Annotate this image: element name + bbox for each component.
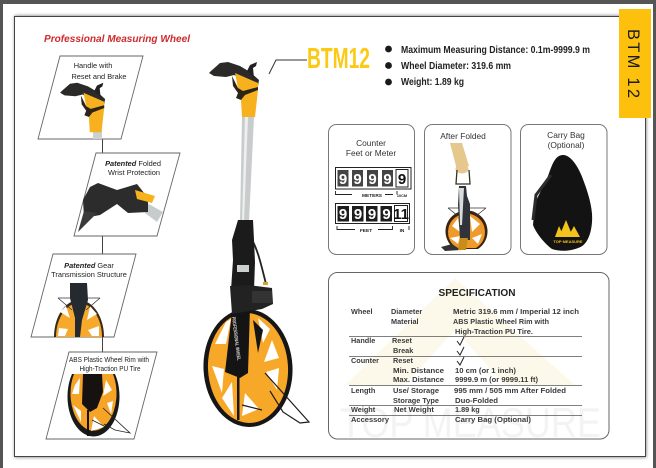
icon: wheel rim photo xyxy=(68,374,130,436)
connector between feature panels xyxy=(102,139,104,352)
panel: wheel rim xyxy=(46,352,157,439)
spec table: Metric 319.6 mm / Imperial 12 inch xyxy=(453,307,579,316)
panel: carry bag xyxy=(520,124,607,254)
spec table: Max. Distance xyxy=(393,375,444,384)
tab: model label: BTM 12 xyxy=(624,29,642,98)
spec table: Reset xyxy=(392,336,412,345)
spec table: Accessory xyxy=(351,415,390,424)
key specs list: Weight: 1.89 kg xyxy=(401,77,464,88)
meter display: 9 xyxy=(398,171,406,188)
feet display: 9 xyxy=(382,206,391,223)
pole xyxy=(240,117,254,222)
meter display: 9 xyxy=(383,171,392,188)
spec table: Handle xyxy=(351,336,375,345)
key specs list: Wheel Diameter: 319.6 mm xyxy=(401,61,511,72)
spec table: Material xyxy=(391,317,419,326)
feet display xyxy=(336,204,410,234)
tab: model label xyxy=(619,9,651,118)
heading: specification: SPECIFICATION xyxy=(438,287,516,299)
text: handle caption: Reset and Brake xyxy=(71,72,127,81)
spec table: 1.89 kg xyxy=(455,405,480,414)
meter display: 9 xyxy=(353,171,362,188)
watermark: top measure logo xyxy=(340,278,601,446)
text: gear caption: Transmission Structure xyxy=(51,270,127,279)
stand wires xyxy=(242,373,309,423)
text: handle caption: Handle with xyxy=(74,61,112,70)
spec table xyxy=(349,307,582,424)
spec table: 9999.9 m (or 9999.11 ft) xyxy=(455,375,539,384)
text: counter heading: Counter xyxy=(356,138,386,148)
heading: model: BTM12 xyxy=(307,43,370,75)
counter housing xyxy=(230,285,273,314)
feet display: 9 xyxy=(339,206,347,223)
spec table: Min. Distance xyxy=(393,366,444,375)
leader line xyxy=(269,60,307,74)
fork xyxy=(253,320,263,353)
icon: folded joint photo xyxy=(78,183,163,232)
text: wrist protection caption: Patented Folded xyxy=(105,159,161,168)
key specs list: Maximum Measuring Distance: 0.1m-9999.9 m xyxy=(401,45,590,56)
key specs list xyxy=(385,45,590,88)
spec table: Use/ Storage xyxy=(393,386,439,395)
feet display: 11 xyxy=(393,206,409,223)
meter display: 9 xyxy=(368,171,377,188)
spec table: High-Traction PU Tire. xyxy=(455,327,533,336)
title: Professional Measuring Wheel xyxy=(44,34,190,45)
text: carry bag heading: (Optional) xyxy=(548,140,585,150)
spec table: 995 mm / 505 mm After Folded xyxy=(454,386,566,395)
feet display: FEET xyxy=(360,228,372,234)
meter display: 10CM xyxy=(397,194,407,198)
panel: handle xyxy=(38,56,143,139)
handle xyxy=(209,62,259,117)
text: after folded heading: After Folded xyxy=(440,131,486,141)
spec table: Carry Bag (Optional) xyxy=(455,415,532,424)
meter display xyxy=(336,168,411,199)
spec table: Break xyxy=(393,346,414,355)
meter display: 9 xyxy=(339,171,347,188)
spec table: Counter xyxy=(351,356,379,365)
product photo: main measuring wheel xyxy=(200,62,309,429)
icon: handle photo xyxy=(60,83,105,139)
text: wheel rim caption: ABS Plastic Wheel Rim with xyxy=(69,355,149,364)
spec table: ABS Plastic Wheel Rim with xyxy=(453,317,549,326)
watermark: top measure logo: TOP MEASURE xyxy=(340,399,601,446)
bag logo: TOP MEASURE xyxy=(553,239,583,244)
icon: gear photo xyxy=(54,283,104,337)
feet display: IN xyxy=(400,228,405,234)
text: counter heading: Feet or Meter xyxy=(346,148,396,158)
spec table: Weight xyxy=(351,405,376,414)
panel: gear transmission xyxy=(31,254,136,337)
spec table: Net Weight xyxy=(394,405,435,414)
text: gear caption: Patented Gear xyxy=(64,261,114,270)
spec table: Diameter xyxy=(391,307,422,316)
spec table: Wheel xyxy=(351,307,372,316)
spec table: Reset xyxy=(393,356,413,365)
photo: folded wheel held by hand xyxy=(441,143,488,251)
upper body xyxy=(231,220,255,290)
feet display: 9 xyxy=(368,206,376,223)
panel: specification xyxy=(328,272,609,446)
spec table: Duo-Folded xyxy=(455,396,498,405)
panel: after folded xyxy=(424,124,511,254)
panel: wrist protection xyxy=(74,153,180,236)
spec table: 10 cm (or 1 inch) xyxy=(455,366,517,375)
text: wheel rim caption: High-Traction PU Tire xyxy=(80,364,140,373)
spec table: Storage Type xyxy=(393,396,439,405)
feet display: 9 xyxy=(354,206,362,223)
meter display: METERS xyxy=(362,193,383,199)
fork label: PROFESSIONAL WHEEL xyxy=(230,317,241,361)
text: wrist protection caption: Wrist Protection xyxy=(108,168,160,177)
wheel xyxy=(200,307,296,429)
spec table: Length xyxy=(351,386,375,395)
cable xyxy=(252,240,266,284)
panel: counter xyxy=(328,124,414,254)
text: carry bag heading: Carry Bag xyxy=(547,130,585,140)
